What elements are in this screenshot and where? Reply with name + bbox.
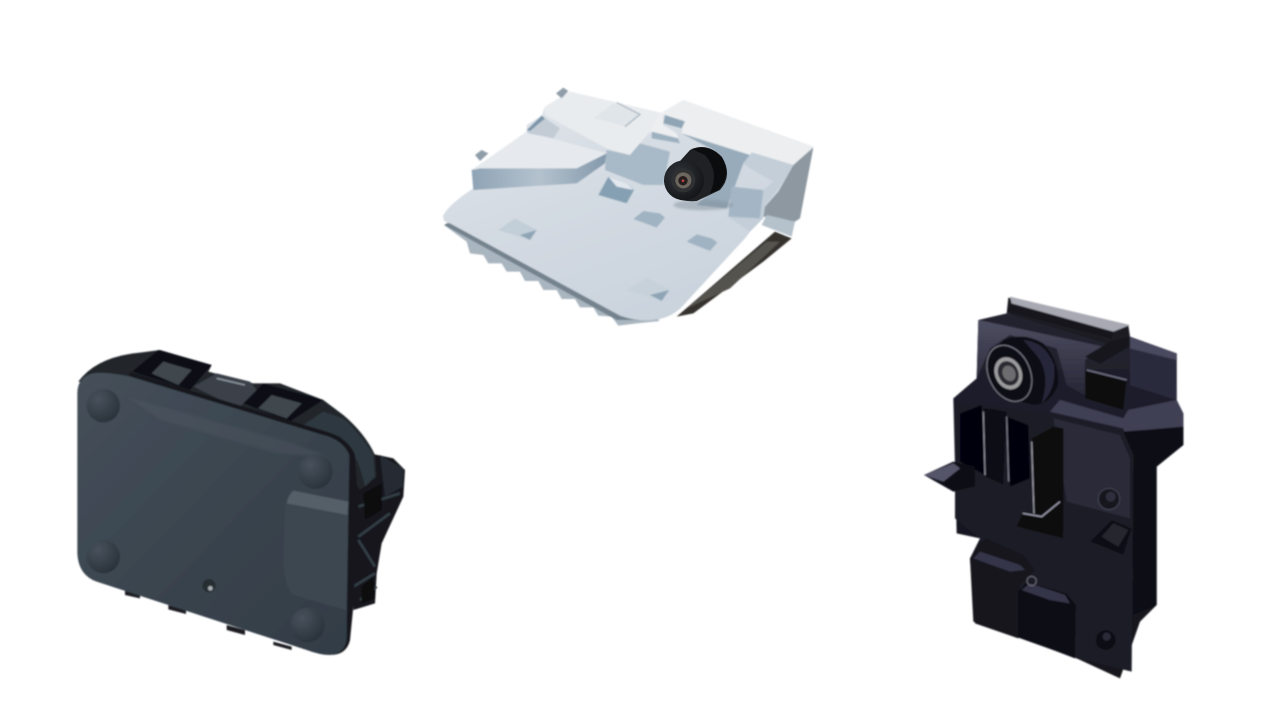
- shoulder: [1050, 400, 1183, 452]
- device: silver camera bracket: [443, 88, 813, 326]
- device: black stereo camera housing: [924, 297, 1183, 678]
- teeth: [444, 225, 660, 326]
- lower blocks: [970, 538, 1035, 638]
- upper body: [953, 313, 1183, 678]
- bumps: [598, 177, 634, 203]
- feet: [87, 389, 120, 422]
- camera lens: [664, 147, 733, 210]
- top rail: [1007, 298, 1130, 348]
- connector right: [347, 453, 405, 610]
- rear ridge: [545, 92, 663, 155]
- main panel: [955, 402, 1133, 672]
- hooks: [924, 462, 975, 492]
- top side: [78, 350, 377, 490]
- bottom tabs: [125, 590, 292, 650]
- screws: [1098, 488, 1120, 510]
- underside dark: [677, 232, 792, 317]
- small pins: [556, 88, 568, 98]
- central block wall: [605, 143, 670, 185]
- right side wall: [763, 148, 813, 222]
- raised pentagon: [472, 132, 607, 173]
- screw hole: [202, 579, 216, 592]
- right inner block: [682, 133, 750, 208]
- main plate: [443, 92, 813, 320]
- lens assembly: [990, 337, 1058, 405]
- device: dark grey sensor housing: [77, 350, 405, 655]
- raised panel: [283, 491, 348, 610]
- main face: [77, 373, 352, 655]
- fins: [960, 405, 985, 475]
